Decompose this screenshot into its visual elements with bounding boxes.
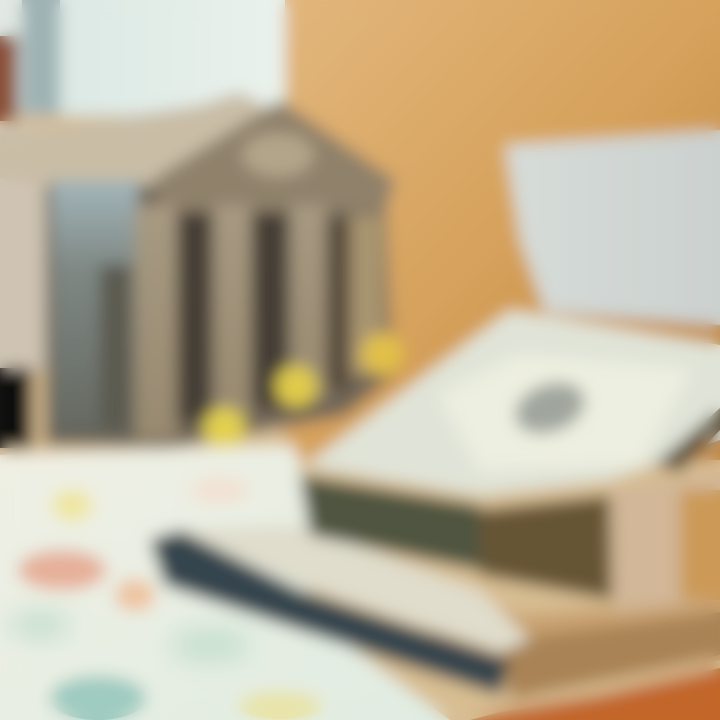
top note xyxy=(305,310,720,495)
grey laptop screen xyxy=(505,130,720,325)
light book page xyxy=(180,525,530,652)
columns xyxy=(135,205,177,440)
pediment xyxy=(155,100,395,212)
money stack xyxy=(300,310,720,612)
dark edge right xyxy=(655,408,720,472)
wooden table corner xyxy=(470,668,720,720)
blue-grey side wall xyxy=(52,180,138,435)
stack side dark green xyxy=(300,475,480,570)
column shadows xyxy=(176,212,212,422)
stack side brown xyxy=(478,495,612,600)
bank building xyxy=(0,92,395,448)
book stack xyxy=(150,525,720,700)
banded end xyxy=(610,472,720,612)
person at left edge xyxy=(0,125,50,448)
lower tan book xyxy=(340,560,720,695)
yellow glow dots xyxy=(203,255,577,449)
dark blue book xyxy=(150,530,510,695)
building body xyxy=(45,175,392,448)
paper marks xyxy=(18,550,106,590)
roof left slope xyxy=(0,92,275,185)
note portrait xyxy=(508,373,592,443)
table with papers xyxy=(0,445,450,720)
